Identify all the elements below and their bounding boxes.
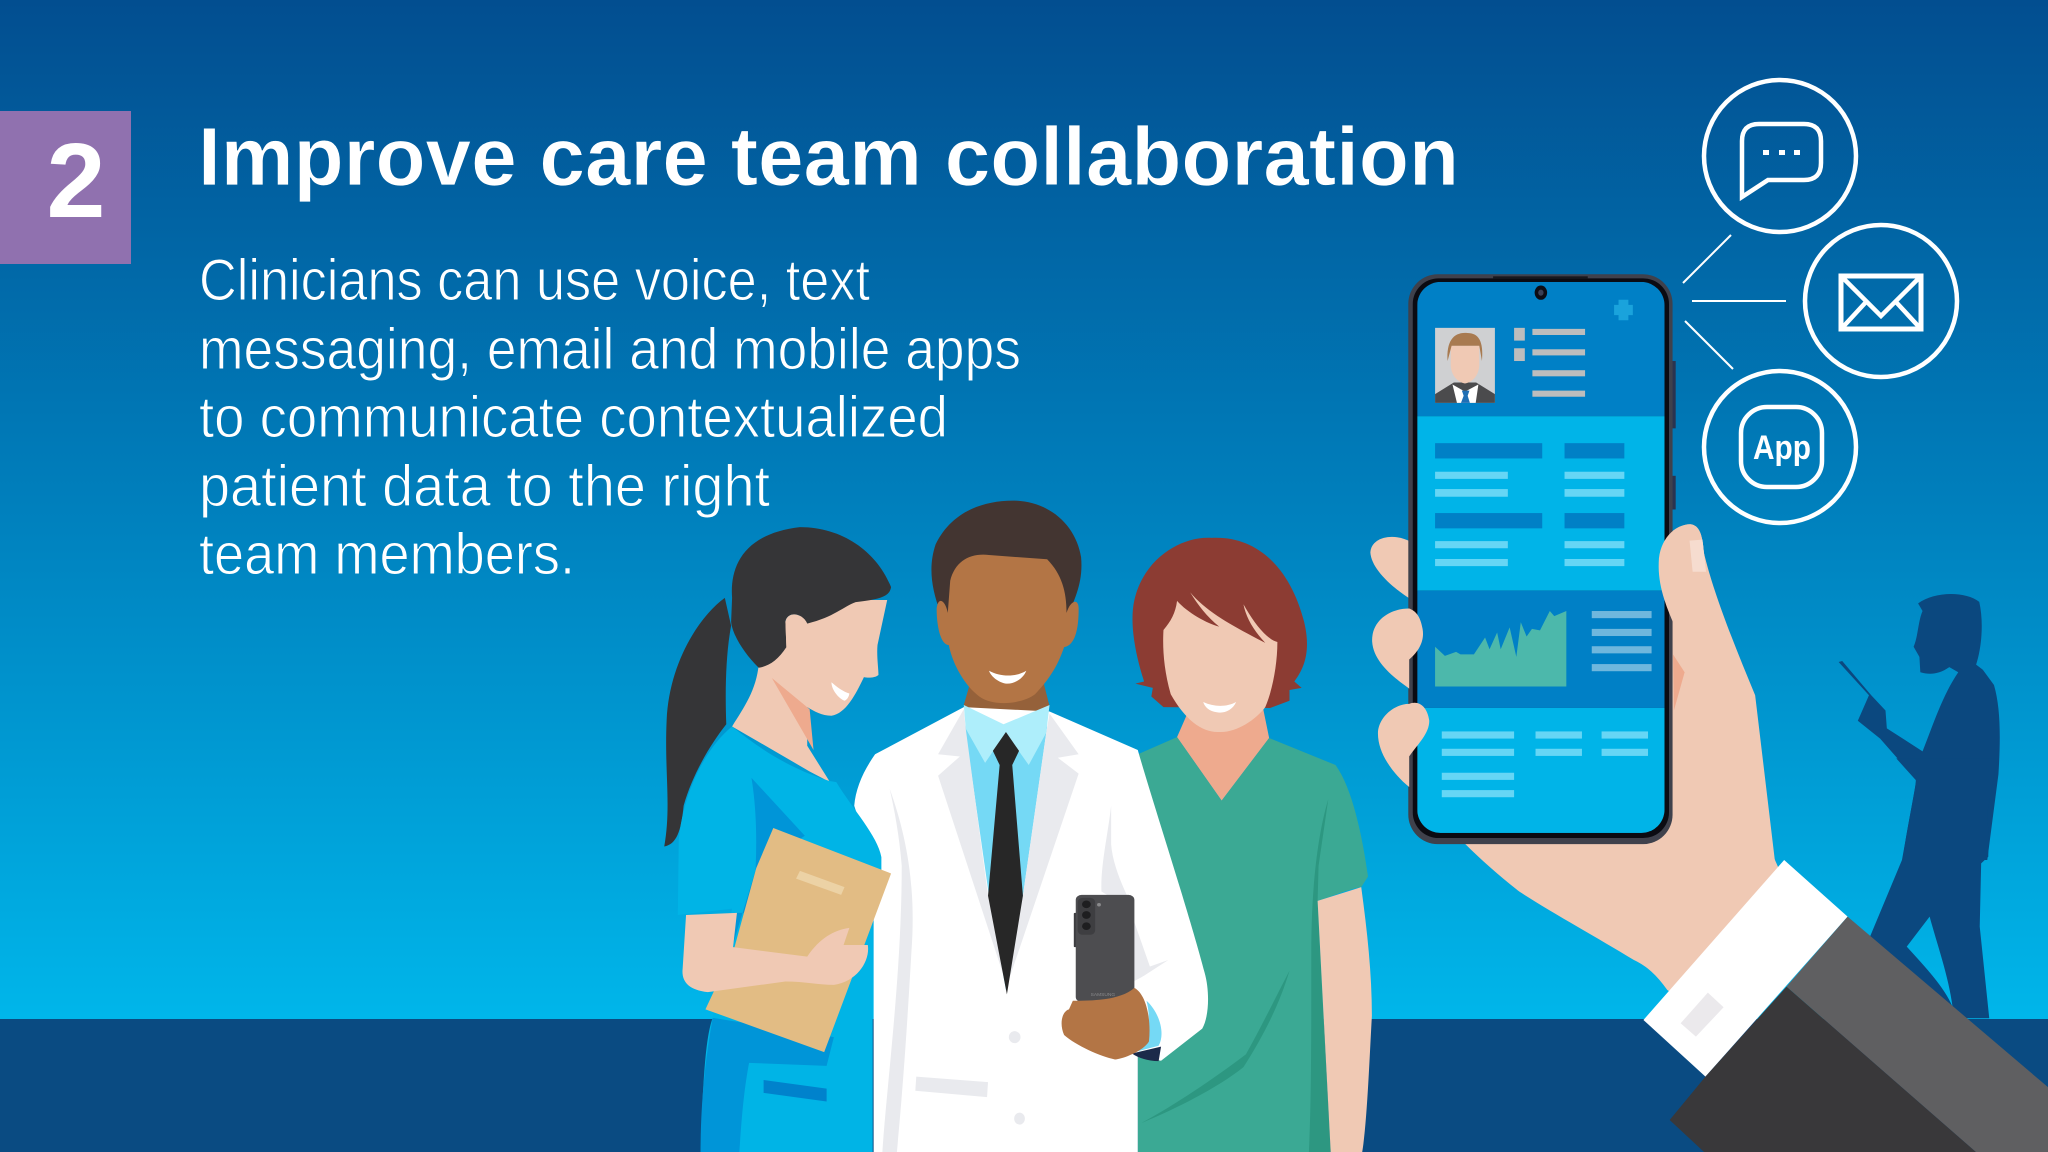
phone screen [1417,282,1665,833]
body text: Clinicians can use voice, text [199,248,870,313]
camera [1535,286,1547,300]
fingers and thumb in front of phone [1372,524,1711,787]
number badge [0,111,131,264]
medical cross [1614,300,1633,320]
cuff button [1681,993,1724,1037]
record header bars [1435,443,1624,528]
palm shadow [1673,654,1685,711]
silhouette: person with phone in background [1839,594,2000,1018]
nurse in blue scrubs with folder [664,527,891,1152]
phone body [1408,274,1673,844]
shirt cuff [1643,860,1848,1077]
body text: messaging, email and mobile apps [199,317,1021,382]
area chart [1435,611,1566,687]
doctor in white coat [854,501,1208,1152]
suit sleeve [1670,917,2048,1152]
connector lines [1683,235,1786,369]
number badge: 2 [47,122,105,240]
profile details [1514,328,1585,397]
icon: chat bubble [1704,80,1856,232]
body text: to communicate contextualized [199,385,948,450]
icon: app: App [1753,429,1811,467]
profile photo [1435,328,1495,403]
woman in green scrubs [1132,538,1372,1152]
body text: team members. [199,522,575,587]
body text [199,248,1021,587]
phone side buttons [1672,361,1676,509]
record text lines [1435,472,1624,566]
thumbnail [1690,540,1706,572]
icon: app [1704,371,1856,523]
icon: envelope [1805,225,1957,377]
hand holding phone: wrist and palm [1465,524,1779,993]
title: Improve care team collaboration [198,110,1459,203]
index finger behind phone [1370,537,1411,600]
chart legend lines [1592,611,1652,671]
body text: patient data to the right [199,454,770,519]
smartphone with patient record [1370,274,1711,844]
floor band [0,1019,2048,1152]
doctor in white coat: SAMSUNG [1091,992,1116,997]
lower text lines [1442,731,1648,797]
